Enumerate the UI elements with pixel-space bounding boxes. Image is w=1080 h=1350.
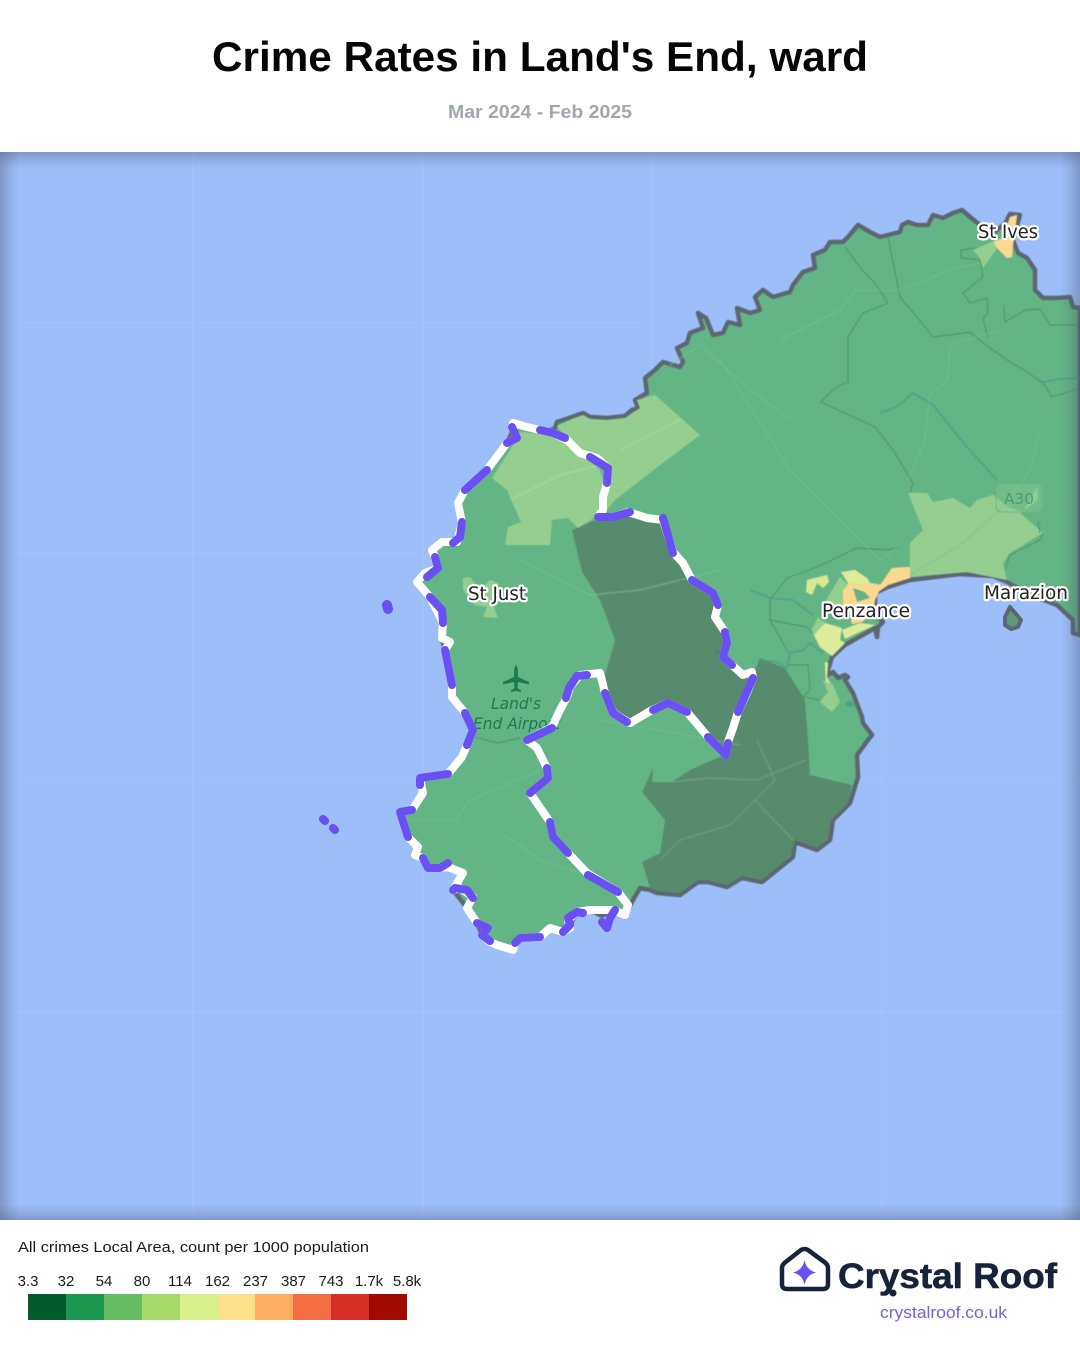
label: A30 road shield: [996, 484, 1042, 512]
St Ives patches: [973, 215, 1017, 268]
legend values: 5.8k: [393, 1273, 422, 1290]
legend colour scale: [28, 1294, 407, 1320]
ward: lighter area north-west: [492, 432, 606, 545]
icon: airport plane: [503, 664, 529, 692]
legend values: 1.7k: [355, 1273, 384, 1290]
ward: dark low-crime area north: [572, 515, 752, 754]
offshore islets: [387, 605, 388, 609]
place labels: St Just: [468, 583, 526, 605]
legend values: 114: [168, 1273, 192, 1290]
legend values: 743: [318, 1273, 344, 1290]
legend values: [18, 1273, 422, 1290]
icon: key dot on the y: [890, 1290, 896, 1296]
legend values: 387: [281, 1273, 306, 1290]
panel: choropleth map: [0, 152, 1080, 1220]
map edge shading: [0, 152, 1080, 1220]
label: A30 road shield: A30: [1004, 490, 1034, 508]
place labels: Penzance: [822, 600, 910, 622]
rivers: [715, 378, 1080, 668]
land: base area with dark coastline: [400, 210, 1080, 950]
icon: house with star: [782, 1249, 828, 1289]
St Just patches: [463, 577, 498, 618]
subtitle: date range: Mar 2024 - Feb 2025: [448, 101, 632, 122]
place labels: [468, 221, 1068, 622]
Penzance wards: [806, 567, 910, 712]
ward: lighter area north: [557, 395, 700, 512]
place labels: St Ives: [978, 221, 1038, 243]
legend values: 80: [134, 1273, 150, 1290]
label: Land's End Airport: [473, 694, 561, 733]
ward boundary: purple dashes: [323, 427, 753, 943]
ward boundary: white outline: [400, 423, 753, 950]
legend: [18, 1239, 422, 1320]
website: crystalroof.co.uk: [880, 1304, 1008, 1322]
label: Land's End Airport: End Airport: [473, 714, 561, 733]
ward: Marazion lighter area: [908, 487, 1043, 580]
legend heading: All crimes Local Area, count per 1000 population: [18, 1239, 369, 1256]
legend values: 54: [96, 1273, 112, 1290]
logo: Crystal Roof: [782, 1249, 1057, 1322]
roads: [400, 262, 1040, 880]
wordmark: Crystal Roof: [838, 1257, 1057, 1296]
legend values: 3.3: [18, 1273, 38, 1290]
land and wards: [400, 210, 1080, 950]
legend values: 237: [243, 1273, 268, 1290]
legend values: 162: [205, 1273, 230, 1290]
St Michael's Mount island: [1005, 607, 1021, 629]
place labels: Marazion: [984, 582, 1068, 604]
title: Crime Rates in Land's End, ward: [212, 33, 868, 80]
legend values: 32: [58, 1273, 74, 1290]
ward: dark low-crime area south-east: [642, 658, 852, 893]
label: Land's End Airport: Land's: [491, 694, 541, 713]
internal ward boundaries: [475, 237, 1080, 743]
sea: [0, 152, 1080, 1220]
